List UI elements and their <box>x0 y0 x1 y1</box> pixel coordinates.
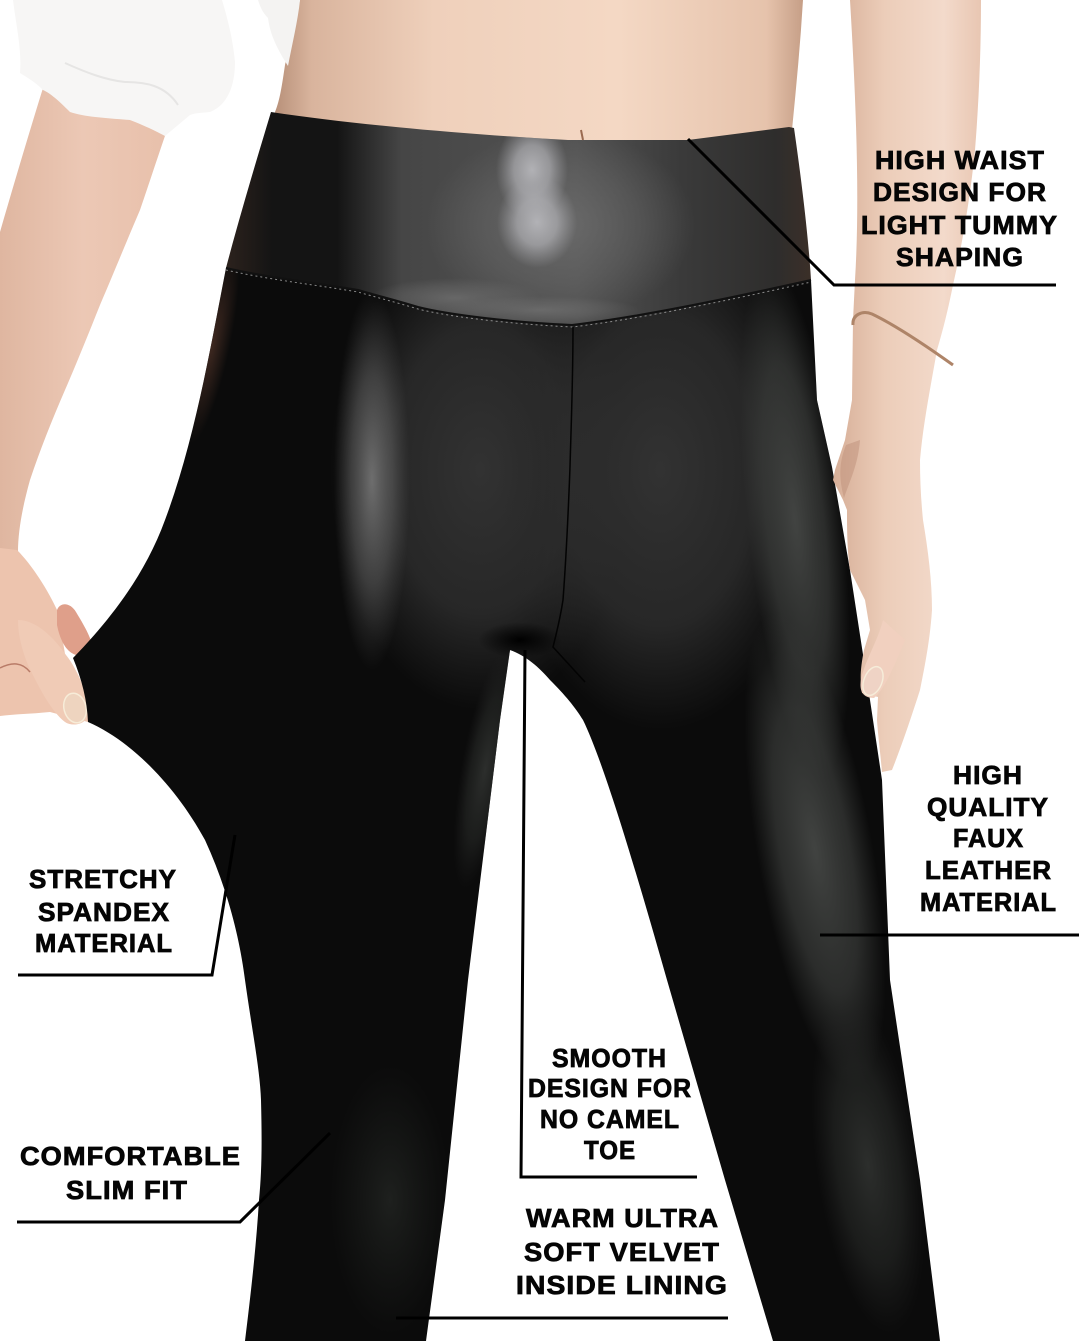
label text: SOFT VELVET <box>524 1237 720 1267</box>
thumb <box>18 620 89 725</box>
callout: high waist <box>688 139 1058 285</box>
label text: QUALITY <box>927 792 1049 822</box>
label text <box>528 1043 692 1165</box>
palm <box>0 548 90 722</box>
leader line <box>18 835 235 975</box>
label text: SPANDEX <box>38 897 170 927</box>
right arm and hand <box>833 0 981 772</box>
label text <box>29 864 177 958</box>
waistband highlights <box>386 136 670 320</box>
seam stitching <box>226 270 811 327</box>
label text: STRETCHY <box>29 864 177 894</box>
label text: SLIM FIT <box>66 1175 188 1205</box>
waistband <box>226 112 811 325</box>
label text: LEATHER <box>925 855 1052 885</box>
sleeve fold <box>65 63 178 105</box>
callout: smooth design <box>521 650 697 1177</box>
waistband seam <box>226 268 811 325</box>
label text <box>861 145 1058 272</box>
label text: DESIGN FOR <box>528 1073 692 1103</box>
label text: INSIDE LINING <box>516 1270 728 1300</box>
white sleeve <box>13 0 235 136</box>
label text: COMFORTABLE <box>20 1141 241 1171</box>
thumb nail <box>859 664 887 698</box>
label text: DESIGN FOR <box>873 177 1047 207</box>
left hand pinching fabric <box>0 548 91 725</box>
label text: NO CAMEL <box>540 1104 680 1134</box>
palm crease <box>0 664 30 672</box>
wrist shadow <box>840 440 860 498</box>
waistband fill <box>226 112 811 325</box>
sleeve right fragment <box>258 0 300 66</box>
label text <box>516 1203 728 1300</box>
callout: comfortable slim fit <box>17 1133 330 1222</box>
callout: faux leather <box>820 760 1079 935</box>
label text <box>920 760 1057 917</box>
thumb <box>860 620 905 698</box>
leader line <box>521 650 697 1177</box>
finger behind fabric <box>57 604 91 655</box>
leader line <box>17 1133 330 1222</box>
leader line <box>820 934 1079 936</box>
label text: FAUX <box>953 823 1024 853</box>
left arm <box>0 88 166 552</box>
label text: TOE <box>584 1135 636 1165</box>
label text: HIGH WAIST <box>875 145 1045 175</box>
center seam <box>553 327 585 682</box>
label text: SHAPING <box>896 242 1024 272</box>
label text: SMOOTH <box>552 1043 667 1073</box>
leader line <box>396 1316 728 1320</box>
navel ring <box>581 130 583 140</box>
arm and palm <box>833 0 981 772</box>
callout: velvet lining <box>396 1203 728 1318</box>
label text: LIGHT TUMMY <box>861 210 1058 240</box>
label text: MATERIAL <box>920 887 1057 917</box>
label text: WARM ULTRA <box>526 1203 719 1233</box>
leggings body <box>73 268 940 1341</box>
bracelet <box>853 313 953 365</box>
label text <box>20 1141 241 1205</box>
callout: stretchy spandex <box>18 835 235 975</box>
leggings sheen <box>174 210 943 1341</box>
label text: MATERIAL <box>35 928 173 958</box>
leader line <box>688 139 1056 285</box>
sleeve main <box>13 0 235 136</box>
thumb nail <box>60 691 90 725</box>
label text: HIGH <box>953 760 1023 790</box>
torso skin <box>275 0 803 150</box>
